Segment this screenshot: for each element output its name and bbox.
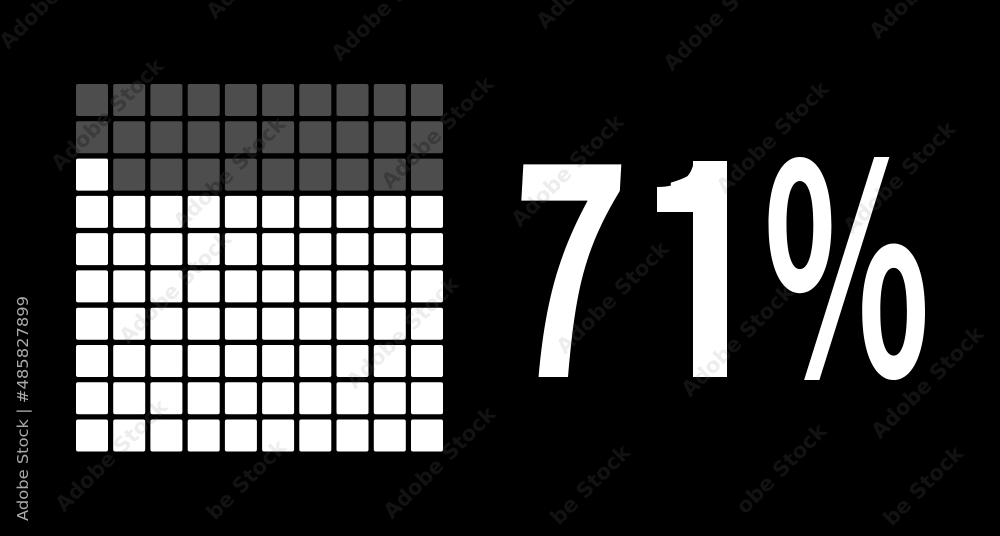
watermarks: Adobe Stock — [342, 271, 464, 394]
watermarks: Adobe Stock — [47, 53, 169, 176]
watermarks: Adobe Stock — [712, 76, 834, 199]
watermarks: Adobe Stock — [379, 401, 501, 524]
watermarks: Adobe Stock — [115, 226, 237, 349]
mixed row: one white square and nine gray — [76, 159, 443, 191]
vertical stock credit: Adobe Stock | #485827899 — [14, 296, 32, 521]
percentage value 71%: 7 — [497, 35, 638, 462]
watermarks: Adobe Stock — [677, 279, 799, 402]
watermarks: Adobe Stock — [51, 394, 173, 517]
watermarks: obe Stock — [732, 418, 832, 519]
filled squares: rows 4 to 10 — [76, 196, 443, 452]
percentage value 71%: % — [763, 39, 931, 460]
watermarks: Adobe Stock — [867, 321, 989, 444]
watermarks: be Stock — [879, 440, 969, 531]
watermarks: be Stock — [546, 439, 636, 530]
percentage value 71%: 1 — [650, 35, 765, 462]
watermarks: Adobe Stock — [839, 116, 961, 239]
waffle chart: 71 of 100 squares filled — [76, 84, 443, 452]
percentage value 71% — [521, 157, 925, 380]
watermarks: Adobe Stock — [169, 111, 291, 234]
watermarks: be Stock — [202, 434, 292, 525]
watermarks: Adobe Stock — [552, 236, 674, 359]
watermarks: Adobe Stock — [377, 71, 499, 194]
unfilled squares: rows 1 and 2 — [76, 84, 443, 153]
watermarks: Adobe Stock — [507, 109, 629, 232]
